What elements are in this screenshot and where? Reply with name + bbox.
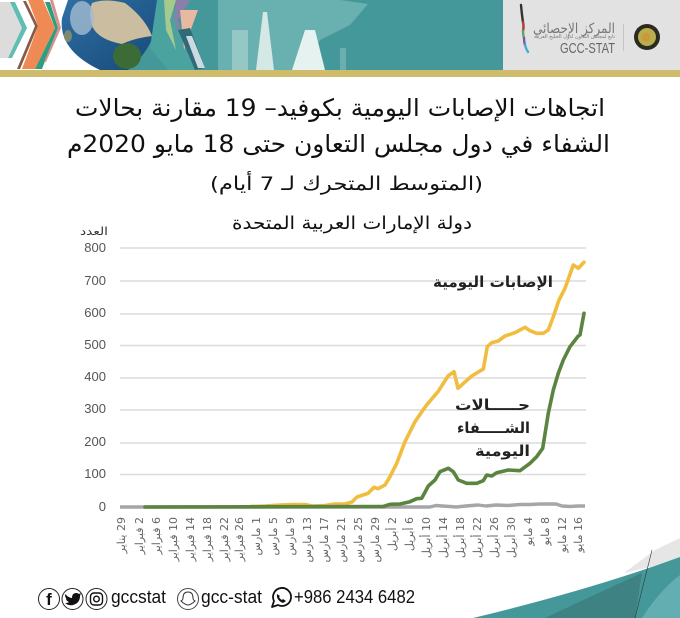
y axis labels: 300 — [84, 401, 106, 416]
y axis labels: 700 — [84, 273, 106, 288]
banner: city and map collage — [150, 0, 368, 70]
chart title: دولة الإمارات العربية المتحدة — [232, 213, 472, 234]
banner: gold stripe — [0, 70, 680, 77]
x axis date labels: 2 فبراير — [133, 517, 146, 555]
label: daily infections: الإصابات اليومية — [433, 273, 553, 291]
icon: twitter — [62, 588, 83, 610]
logo: arabic name: المركز الإحصائي — [533, 21, 615, 37]
series: daily recoveries gray baseline — [120, 504, 585, 507]
x axis date labels: 13 مارس — [301, 517, 314, 562]
series: daily infections — [250, 262, 584, 506]
x axis date labels: 5 مارس — [267, 517, 280, 555]
x axis date labels: 8 مايو — [539, 517, 552, 546]
line chart — [80, 225, 586, 562]
x axis date labels: 18 فبراير — [201, 517, 214, 562]
x axis date labels: 14 أبريل — [436, 517, 450, 558]
banner: left chevrons — [0, 0, 110, 70]
x axis date labels: 2 أبريل — [385, 517, 399, 551]
logo: emblem — [634, 24, 660, 50]
icon: facebook — [38, 588, 60, 610]
x axis date labels: 21 مارس — [335, 517, 348, 562]
y axis labels: 400 — [84, 369, 106, 384]
label: daily recoveries: حـــــالات — [455, 396, 530, 414]
x axis date labels: 22 أبريل — [470, 517, 484, 558]
label: daily recoveries: الشـــــفاء — [457, 419, 530, 437]
x axis date labels: 16 مايو — [572, 517, 585, 553]
x axis date labels: 9 مارس — [284, 517, 297, 555]
phone number: +986 2434 6482 — [294, 587, 415, 607]
x axis date labels: 22 فبراير — [218, 517, 231, 562]
y axis labels — [84, 240, 106, 514]
x axis date labels: 4 مايو — [522, 517, 535, 546]
x axis date labels: 10 فبراير — [167, 517, 180, 562]
footer swoosh — [473, 538, 680, 618]
x axis date labels: 25 مارس — [352, 517, 365, 562]
subtitle: moving average: (المتوسط المتحرك لـ 7 أيام) — [210, 171, 483, 195]
logo: ribbon mark — [521, 5, 528, 52]
handle: gccstat: gccstat — [111, 587, 166, 607]
x axis date labels: 1 مارس — [250, 517, 263, 555]
x axis date labels: 30 أبريل — [504, 517, 518, 558]
title: الشفاء في دول مجلس التعاون حتى 18 مايو 2020م — [67, 130, 610, 158]
y axis title: العدد — [80, 225, 108, 238]
label: daily recoveries — [455, 396, 530, 460]
y axis labels: 800 — [84, 240, 106, 255]
icon: whatsapp — [272, 588, 291, 607]
banner: globe — [62, 0, 158, 70]
x axis date labels: 18 أبريل — [453, 517, 467, 558]
label: daily recoveries: اليومية — [475, 442, 530, 460]
footer: social contacts — [38, 587, 415, 610]
x axis date labels: 12 مايو — [556, 517, 569, 553]
y axis labels: 200 — [84, 434, 106, 449]
title: اتجاهات الإصابات اليومية بكوفيد– 19 مقارنة بحالات — [75, 94, 605, 122]
icon: facebook: f — [46, 590, 52, 609]
x axis date labels: 6 فبراير — [150, 517, 163, 555]
logo: arabic subtitle: تابع لمجلس التعاون لدول الخليج العربية — [534, 34, 616, 40]
x axis date labels: 14 فبراير — [184, 517, 197, 562]
icon: snapchat — [178, 588, 198, 610]
x axis date labels — [115, 517, 585, 562]
x axis date labels: 29 يناير — [115, 517, 128, 554]
icon: instagram — [86, 588, 107, 610]
x axis date labels: 26 فبراير — [233, 517, 246, 562]
y axis labels: 0 — [99, 499, 106, 514]
logo: GCC-STAT wordmark: GCC-STAT — [560, 40, 615, 57]
x axis date labels: 6 أبريل — [402, 517, 416, 551]
header banner — [0, 0, 680, 77]
x axis date labels: 26 أبريل — [487, 517, 501, 558]
title — [67, 94, 610, 158]
x axis date labels: 10 أبريل — [419, 517, 433, 558]
x axis date labels: 17 مارس — [318, 517, 331, 562]
y axis labels: 100 — [84, 466, 106, 481]
banner: logo panel — [503, 0, 680, 70]
y axis labels: 500 — [84, 337, 106, 352]
handle: gcc-stat: gcc-stat — [201, 587, 262, 607]
series: daily recoveries — [145, 313, 584, 507]
y axis labels: 600 — [84, 305, 106, 320]
x axis date labels: 29 مارس — [369, 517, 382, 562]
